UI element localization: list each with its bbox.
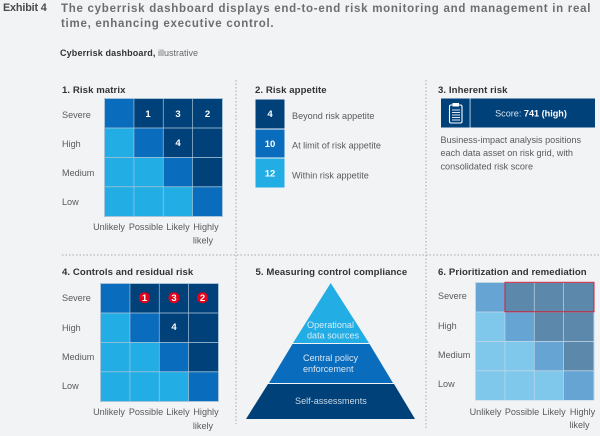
column labels: Highly — [193, 222, 219, 232]
pyramid — [246, 283, 415, 419]
legend counts: 10 — [265, 139, 275, 150]
pyramid: enforcement — [303, 364, 354, 374]
column labels: Unlikely — [470, 407, 502, 417]
column labels: Likely — [166, 407, 190, 417]
red highlight box — [505, 282, 594, 312]
heading: measuring control compliance: 5. Measuring control compliance — [256, 267, 407, 278]
row labels: Severe — [62, 110, 91, 120]
column labels: Highly — [570, 407, 596, 417]
description: consolidated risk score — [440, 162, 533, 172]
column labels: Unlikely — [93, 222, 125, 232]
legend counts: 4 — [267, 109, 273, 120]
row labels: Low — [438, 379, 455, 389]
red risk markers: 2 — [200, 293, 205, 304]
row labels: Severe — [62, 293, 91, 303]
row labels: Low — [62, 197, 79, 207]
red risk markers — [139, 292, 208, 304]
panel: prioritization and remediation — [438, 267, 596, 430]
column labels: likely — [193, 421, 214, 431]
row labels: High — [62, 139, 81, 149]
column labels: Highly — [193, 407, 219, 417]
legend swatches — [256, 100, 284, 188]
score bar: Score: 741 (high) — [495, 108, 567, 118]
dividers — [62, 80, 600, 430]
panel: controls and residual risk — [62, 267, 219, 431]
title: time, enhancing executive control. — [61, 18, 274, 30]
column labels: Likely — [166, 222, 190, 232]
row labels: Medium — [62, 168, 94, 178]
residual count: 4 — [171, 322, 177, 333]
icon: clipboard — [450, 103, 462, 123]
title: The cyberrisk dashboard displays end-to-end risk monitoring and management in real — [61, 3, 591, 15]
column labels: likely — [569, 420, 590, 430]
column labels: Unlikely — [93, 407, 125, 417]
matrix grid — [104, 98, 223, 217]
column labels: Possible — [129, 222, 163, 232]
heading: risk appetite: 2. Risk appetite — [255, 85, 327, 96]
row labels: Low — [62, 381, 79, 391]
heading: controls and residual risk: 4. Controls and residual risk — [62, 267, 194, 278]
matrix counts: 1 — [145, 109, 151, 120]
red risk markers: 3 — [171, 293, 177, 304]
pyramid: Self-assessments — [295, 396, 367, 406]
pyramid: data sources — [307, 330, 360, 340]
column labels: Likely — [542, 407, 566, 417]
legend counts: 12 — [265, 168, 275, 180]
pyramid: Operational — [307, 320, 354, 330]
heading: prioritization and remediation: 6. Prioritization and remediation — [438, 267, 587, 278]
matrix counts: 3 — [175, 109, 181, 120]
row labels: Severe — [438, 291, 467, 301]
legend labels: Beyond risk appetite — [292, 111, 374, 121]
legend labels: At limit of risk appetite — [292, 140, 381, 150]
matrix grid — [100, 283, 219, 402]
description: each data asset on risk grid, with — [440, 148, 573, 158]
row labels: Medium — [438, 350, 470, 360]
matrix grid — [475, 282, 594, 400]
heading: inherent risk: 3. Inherent risk — [438, 85, 508, 96]
score bar — [441, 98, 595, 128]
row labels: High — [438, 321, 457, 331]
heading: risk matrix: 1. Risk matrix — [62, 85, 126, 96]
matrix counts: 2 — [205, 109, 210, 120]
row labels: High — [62, 323, 81, 333]
panel: risk appetite — [255, 85, 381, 188]
legend labels: Within risk appetite — [292, 170, 369, 180]
column labels: likely — [193, 236, 214, 246]
row labels: Medium — [62, 352, 94, 362]
column labels: Possible — [129, 407, 163, 417]
column labels: Possible — [505, 407, 539, 417]
panel: inherent risk — [438, 85, 595, 172]
pyramid: Central policy — [303, 353, 359, 363]
description: Business-impact analysis positions — [440, 135, 581, 145]
matrix counts: 4 — [175, 138, 181, 149]
panel: risk matrix — [62, 85, 223, 246]
exhibit label: Exhibit 4 — [3, 2, 47, 14]
subtitle: Cyberrisk dashboard, illustrative — [60, 48, 198, 58]
panel: measuring control compliance — [246, 267, 415, 419]
red risk markers: 1 — [142, 293, 148, 304]
